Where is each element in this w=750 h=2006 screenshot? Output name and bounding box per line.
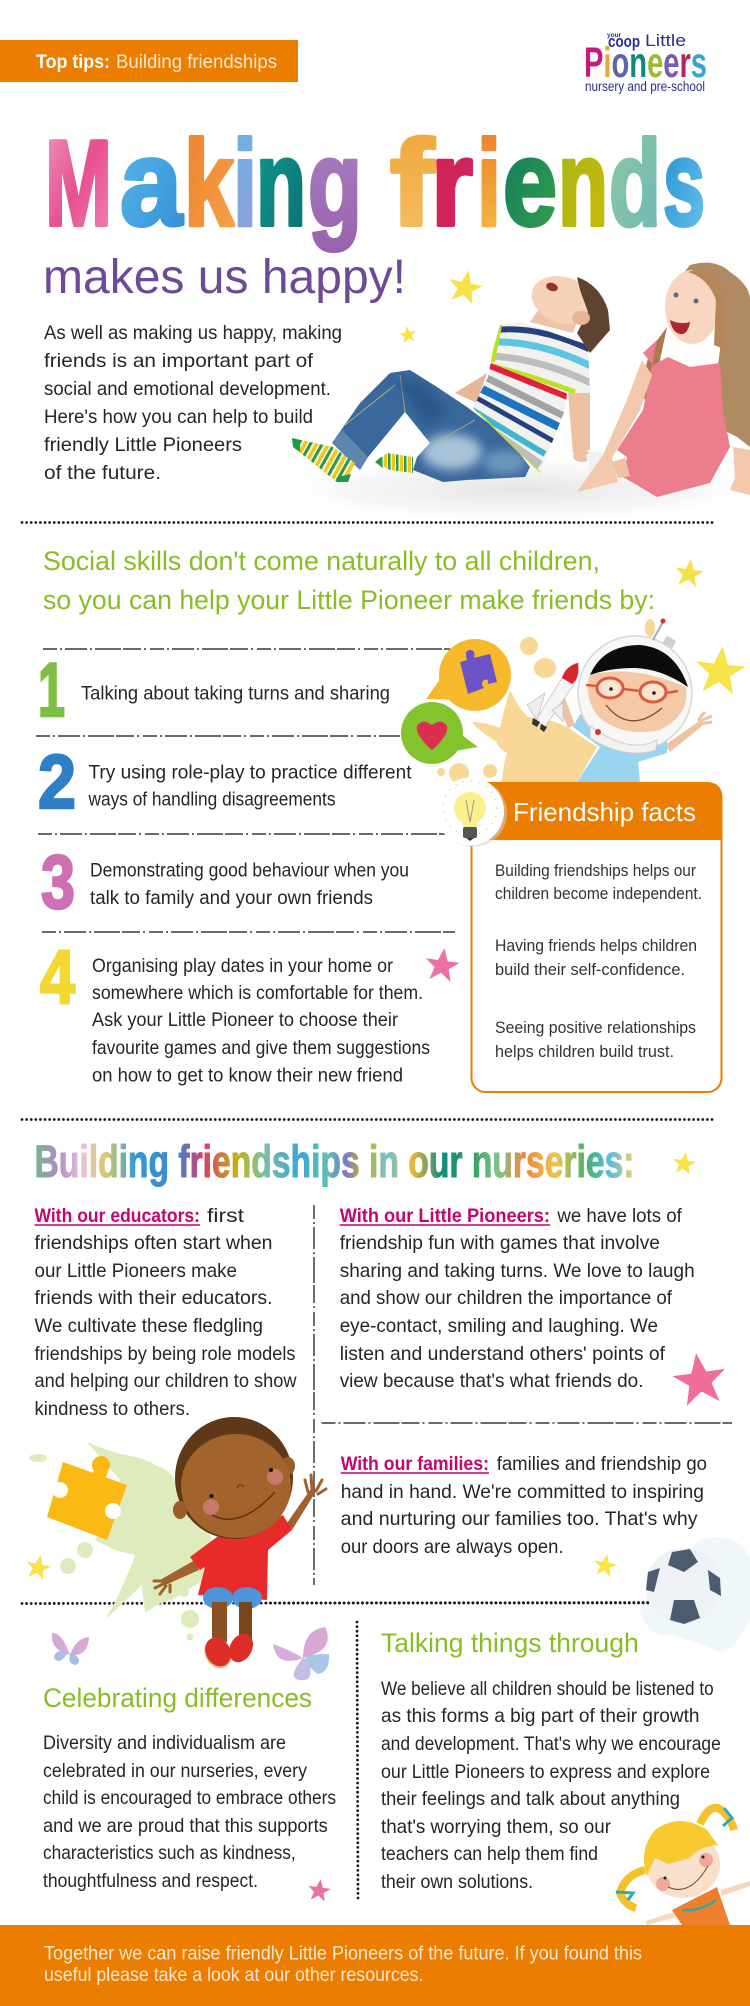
- text block: with our little pioneers: eye-contact, smiling and laughing. We: [340, 1315, 658, 1337]
- panel: talking things through: [381, 1628, 721, 1893]
- step dividers: [36, 649, 455, 932]
- text block: with our little pioneers: With our Little Pioneers:: [340, 1205, 550, 1227]
- paragraph: their own solutions.: [381, 1871, 533, 1893]
- title: Making friends: a: [120, 115, 183, 251]
- paragraph: as this forms a big part of their growth: [381, 1705, 700, 1727]
- intro paragraph: As well as making us happy, making: [44, 322, 342, 344]
- step 3: [41, 840, 409, 925]
- title: Making friends: k: [184, 115, 234, 251]
- divider dotted 3 right part: [266, 1602, 648, 1604]
- panel: celebrating differences: [43, 1683, 336, 1892]
- divider dotted 1: [22, 521, 715, 524]
- step 2: ways of handling disagreements: [88, 789, 336, 811]
- text block: with our educators: kindness to others.: [34, 1398, 190, 1420]
- icon: green speech bubble with heart: [401, 702, 478, 764]
- divider: wavy right column: [322, 1422, 732, 1424]
- icon: large pink star: [670, 1350, 729, 1407]
- footer banner: Together we can raise friendly Little Pioneers of the future. If you found this: [44, 1944, 642, 1964]
- step 4: Organising play dates in your home or: [92, 955, 393, 977]
- heading: social skills: Social skills don't come naturally to all children,: [43, 546, 600, 576]
- text block: with our families: our doors are always open.: [341, 1536, 564, 1558]
- fact 1: Building friendships helps our: [495, 862, 696, 880]
- step 3: 3: [41, 840, 75, 925]
- paragraph: their feelings and talk about anything: [381, 1788, 680, 1810]
- step 2: 2: [38, 740, 76, 825]
- step 1: [38, 648, 390, 733]
- icon: small star: [592, 1552, 618, 1578]
- logo: Little Pioneers: coop: [608, 32, 640, 51]
- title: Making friends: r: [431, 115, 473, 251]
- icon: star near heading: [671, 1151, 697, 1175]
- text block: with our families: hand in hand. We're committed to inspiring: [341, 1481, 704, 1503]
- icon: pink star: [423, 946, 461, 983]
- title: Making friends: i: [233, 115, 257, 251]
- title: Making friends: s: [663, 115, 705, 251]
- footer banner: [0, 1925, 750, 2006]
- intro paragraph: [44, 322, 342, 484]
- illustration: girl with pigtails: [616, 1808, 750, 1925]
- intro paragraph: Here's how you can help to build: [44, 406, 313, 428]
- fact 2: Having friends helps children: [495, 937, 697, 955]
- icon: butterfly left: [52, 1633, 89, 1665]
- paragraph: child is encouraged to embrace others: [43, 1787, 336, 1809]
- step 1: 1: [38, 648, 65, 733]
- heading: social skills: [43, 546, 655, 615]
- intro paragraph: social and emotional development.: [44, 378, 331, 400]
- step 4: somewhere which is comfortable for them.: [92, 982, 423, 1004]
- text block: with our educators: first: [207, 1205, 245, 1227]
- heading: Celebrating differences: [43, 1683, 312, 1713]
- title: Making friends: [45, 115, 705, 251]
- vertical divider: [313, 1205, 315, 1585]
- fact 3: helps children build trust.: [495, 1043, 674, 1061]
- intro paragraph: friendly Little Pioneers: [44, 434, 242, 456]
- intro paragraph: friends is an important part of: [44, 350, 314, 372]
- text block: with our educators: our Little Pioneers make: [34, 1260, 237, 1282]
- fact 2: [495, 937, 697, 979]
- text block: with our families: [341, 1453, 707, 1558]
- paragraph: [381, 1678, 721, 1893]
- top tips banner: Top tips:: [36, 51, 110, 73]
- photo: laughing girl: [577, 263, 750, 497]
- illustration: child in red shirt: [154, 1417, 326, 1673]
- paragraph: celebrated in our nurseries, every: [43, 1760, 307, 1782]
- step 4: Ask your Little Pioneer to choose their: [92, 1009, 398, 1031]
- fact 3: Seeing positive relationships: [495, 1019, 696, 1037]
- text block: with our educators: We cultivate these fledgling: [34, 1315, 263, 1337]
- text block: with our little pioneers: friendship fun with games that involve: [340, 1232, 660, 1254]
- paragraph: We believe all children should be listened to: [381, 1678, 714, 1700]
- title: Making friends: n: [256, 115, 306, 251]
- title: Making friends: e: [503, 115, 557, 251]
- paragraph: teachers can help them find: [381, 1843, 598, 1865]
- text block: with our educators: With our educators:: [34, 1205, 200, 1227]
- title: Making friends: n: [558, 115, 608, 251]
- step 4: on how to get to know their new friend: [92, 1065, 403, 1087]
- paragraph: thoughtfulness and respect.: [43, 1870, 258, 1892]
- footer banner: useful please take a look at our other resources.: [44, 1965, 424, 1986]
- logo: Little Pioneers: Little: [645, 32, 686, 50]
- text block: with our little pioneers: view because that's what friends do.: [340, 1370, 644, 1392]
- photo: floor shadow: [270, 458, 750, 522]
- icon: big yellow star: [693, 644, 747, 696]
- logo: Little Pioneers: nursery and pre-school: [585, 78, 705, 94]
- divider dotted 2: [22, 1118, 715, 1121]
- intro paragraph: of the future.: [44, 462, 161, 484]
- title: Making friends: d: [609, 115, 661, 251]
- photo: laughing boy: [292, 268, 610, 482]
- icon: yellow star large: [445, 267, 485, 306]
- fact 2: build their self-confidence.: [495, 961, 685, 979]
- title: Making friends: f: [390, 115, 434, 251]
- icon: yellow puzzle piece: [47, 1456, 127, 1540]
- step 1: Talking about taking turns and sharing: [81, 682, 390, 704]
- step 2: [38, 740, 412, 825]
- text block: with our little pioneers: and show our children the importance of: [340, 1287, 673, 1309]
- icon: yellow star small: [398, 325, 418, 344]
- text block: with our educators: friendships by being role models: [34, 1343, 296, 1365]
- illustration: green splash: [29, 1442, 215, 1640]
- step 4: 4: [40, 935, 75, 1020]
- step 4: [40, 935, 430, 1087]
- top tips banner: Building friendships: [116, 51, 277, 73]
- divider dotted 3: [22, 1602, 648, 1604]
- heading: Talking things through: [381, 1628, 639, 1658]
- logo: Little Pioneers: Pioneers: [584, 39, 707, 87]
- text block: with our little pioneers: we have lots of: [556, 1205, 682, 1227]
- icon: pink star small: [306, 1878, 332, 1902]
- fact 1: [495, 862, 702, 903]
- paragraph: Diversity and individualism are: [43, 1732, 286, 1754]
- text block: with our little pioneers: [340, 1205, 695, 1392]
- text block: with our educators: and helping our children to show: [34, 1370, 297, 1392]
- text block: with our educators: friends with their educators.: [34, 1287, 272, 1309]
- icon: star near heading: [673, 557, 705, 588]
- section divider dotted vertical: [357, 1622, 358, 1900]
- icon: football with blue splash: [640, 1538, 750, 1652]
- text block: with our educators: [34, 1205, 297, 1420]
- icon: light bulb: [436, 778, 507, 847]
- paragraph: our Little Pioneers to express and explore: [381, 1761, 710, 1783]
- title: Making friends: g: [308, 115, 362, 251]
- step 3: Demonstrating good behaviour when you: [90, 860, 409, 882]
- title: Making friends: i: [477, 115, 501, 251]
- illustration: peach splash: [437, 619, 655, 783]
- title: Making friends: M: [45, 115, 112, 251]
- paragraph: [43, 1732, 336, 1892]
- icon: yellow speech bubble with puzzle: [426, 639, 511, 711]
- icon: star left: [24, 1553, 53, 1581]
- icon: butterfly right: [273, 1627, 329, 1680]
- top tips banner: [0, 40, 298, 82]
- fact 3: [495, 1019, 696, 1061]
- paragraph: that's worrying them, so our: [381, 1816, 611, 1838]
- subtitle: makes us happy: makes us happy!: [43, 251, 406, 304]
- heading: social skills: so you can help your Little Pioneer make friends by:: [43, 585, 655, 615]
- text block: with our families: and nurturing our families too. That's why: [341, 1508, 698, 1530]
- step 4: favourite games and give them suggestions: [92, 1037, 430, 1059]
- text block: with our families: With our families:: [341, 1453, 489, 1475]
- panel: friendship facts: [471, 782, 722, 1092]
- step 2: Try using role-play to practice different: [88, 762, 412, 784]
- panel heading: Friendship facts: [513, 797, 696, 827]
- paragraph: characteristics such as kindness,: [43, 1842, 296, 1864]
- text block: with our little pioneers: listen and understand others' points of: [340, 1343, 666, 1365]
- text block: with our families: families and friendship go: [497, 1453, 707, 1475]
- fact 1: children become independent.: [495, 885, 702, 903]
- illustration: astronaut child: [527, 618, 712, 782]
- step 3: talk to family and your own friends: [90, 887, 373, 909]
- text block: with our educators: friendships often start when: [34, 1232, 272, 1254]
- paragraph: and we are proud that this supports: [43, 1815, 328, 1837]
- text block: with our little pioneers: sharing and taking turns. We love to laugh: [340, 1260, 695, 1282]
- logo: Little Pioneers: your: [607, 32, 622, 39]
